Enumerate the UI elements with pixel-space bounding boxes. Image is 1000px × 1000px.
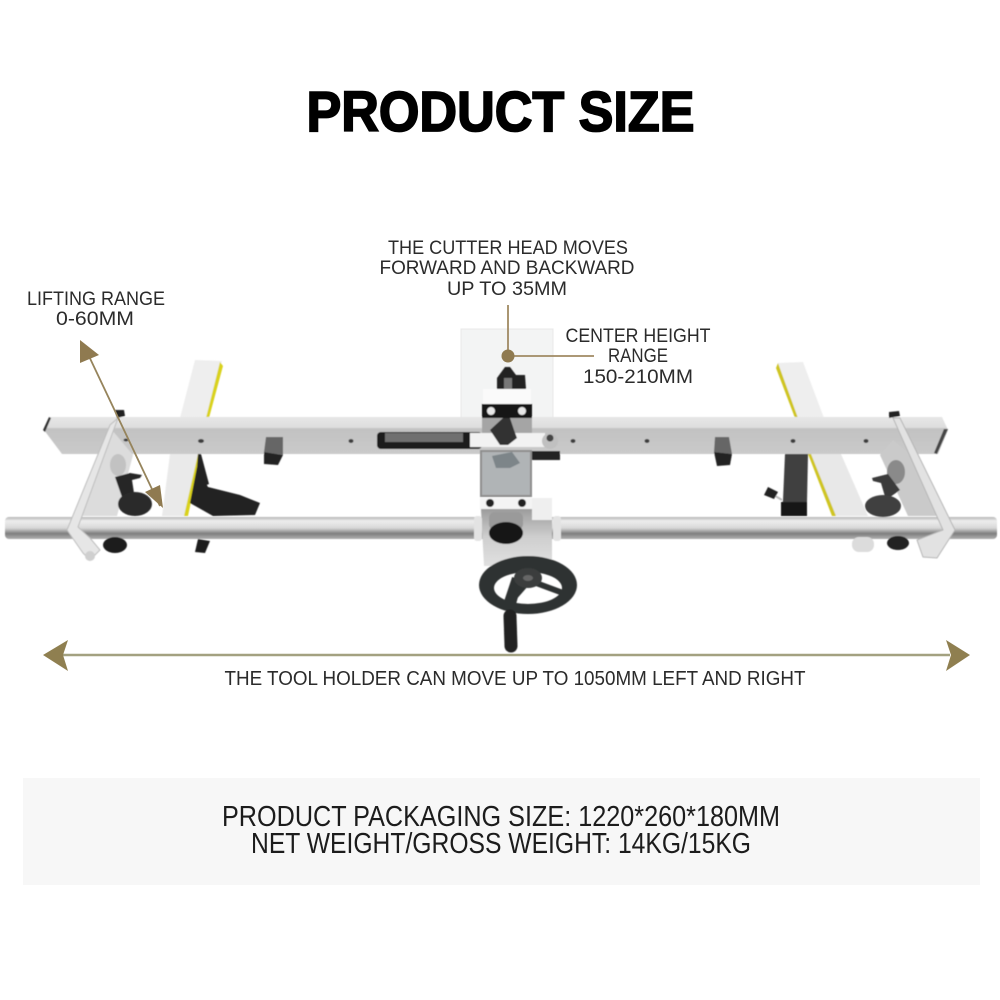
upper square bar: [43, 417, 948, 454]
center dial knob: [489, 512, 523, 544]
caption: tool holder travel: THE TOOL HOLDER CAN MOVE UP TO 1050MM LEFT AND RIGHT: [224, 668, 806, 690]
arrow: lifting range: [80, 340, 163, 508]
callout: center height range: 150-210MM: [583, 367, 693, 388]
left bracket plate: [78, 430, 133, 516]
callout: center height range: CENTER HEIGHT: [566, 326, 711, 347]
center carriage: [474, 498, 561, 566]
callout: cutter head travel: UP TO 35MM: [447, 279, 567, 300]
callout: cutter head travel: [380, 238, 634, 300]
left lift knob: [115, 473, 152, 516]
right small knob: [764, 487, 782, 500]
product: lathe copy attachment: [5, 360, 997, 646]
callout: cutter head travel: FORWARD AND BACKWARD: [380, 258, 634, 279]
title: PRODUCT SIZE: [306, 80, 694, 144]
callout: center height range: RANGE: [608, 346, 668, 367]
left black strap: [190, 454, 260, 516]
lower round rod: [5, 517, 997, 539]
callout: lifting range: 0-60MM: [56, 309, 134, 330]
right lift knob: [865, 474, 901, 517]
weight text: NET WEIGHT/GROSS WEIGHT: 14KG/15KG: [251, 828, 751, 860]
right bracket plate: [880, 440, 937, 516]
bar clamps: [264, 437, 732, 466]
center slide plate: [480, 450, 532, 497]
right bracket strip: [889, 411, 955, 558]
callout: lifting range: [27, 289, 165, 330]
bar holes: [124, 438, 868, 443]
left bracket strip: [67, 410, 125, 561]
callout: cutter head travel: THE CUTTER HEAD MOVES: [388, 238, 628, 259]
lower knobs: [103, 536, 909, 553]
transparent center height panel: [461, 329, 553, 420]
panel: packaging info: [23, 778, 980, 885]
callout: center height range: [566, 326, 711, 388]
right yellow-edged board: [776, 362, 868, 516]
arrow: left and right travel: [43, 640, 970, 671]
callout: lifting range: LIFTING RANGE: [27, 289, 165, 310]
left yellow-edged board: [162, 360, 223, 516]
packaging size text: PRODUCT PACKAGING SIZE: 1220*260*180MM: [222, 801, 780, 833]
tool holder block: [482, 389, 532, 445]
cutter head: [497, 367, 526, 389]
cross bar handle: [377, 432, 560, 460]
leader lines: cutter head and center height: [502, 305, 594, 362]
right black strap: [781, 454, 808, 516]
hand wheel: [479, 556, 577, 646]
